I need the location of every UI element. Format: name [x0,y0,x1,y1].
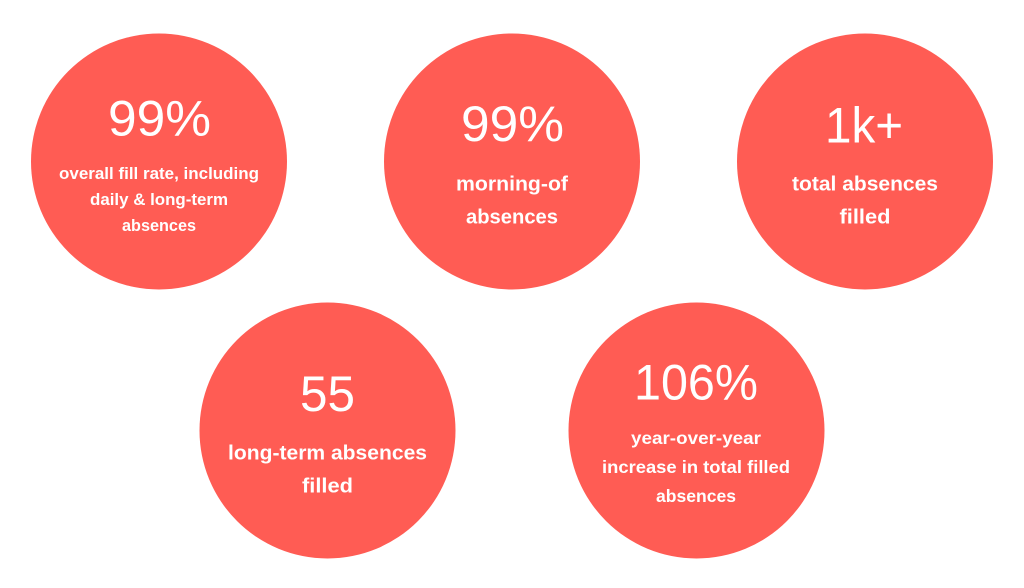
stat description: long-term absences filled: long-term absences [228,442,427,464]
stat description: morning-of absences: morning-of [456,174,568,196]
stat circle: 99% morning-of absences [384,34,640,290]
stat circle: 99% overall fill rate [31,34,287,290]
stat description: overall fill rate [59,165,259,235]
stat description: total absences filled: total absences [792,174,938,196]
stat number: 99%: 99% [108,90,211,146]
stat description: overall fill rate: overall fill rate, including [59,165,259,183]
stat description: overall fill rate: daily & long-term [90,191,228,209]
stat number: 1k+: 1k+ [825,98,903,154]
stat description: total absences filled [792,174,938,228]
stat description: morning-of absences [456,174,568,228]
stat description: year-over-year increase: year-over-year [631,428,761,448]
stat description: overall fill rate: absences [122,217,196,235]
stat description: total absences filled: filled [840,206,890,228]
stat number: 55: 55 [300,366,355,422]
stat number: 106%: 106% [634,354,758,410]
stat description: long-term absences filled: filled [302,476,353,498]
stat description: year-over-year increase [602,428,790,506]
stat description: morning-of absences: absences [466,206,558,228]
stat number: 99%: 99% [461,96,564,152]
stat description: year-over-year increase: increase in total filled [602,457,790,477]
stat circle: 1k+ total absences filled [737,34,993,290]
stat circle: 55 long-term absences filled [200,302,456,558]
stat circle: 106% year-over-year increase [568,302,824,558]
stat description: year-over-year increase: absences [656,486,736,506]
stat description: long-term absences filled [228,442,427,498]
